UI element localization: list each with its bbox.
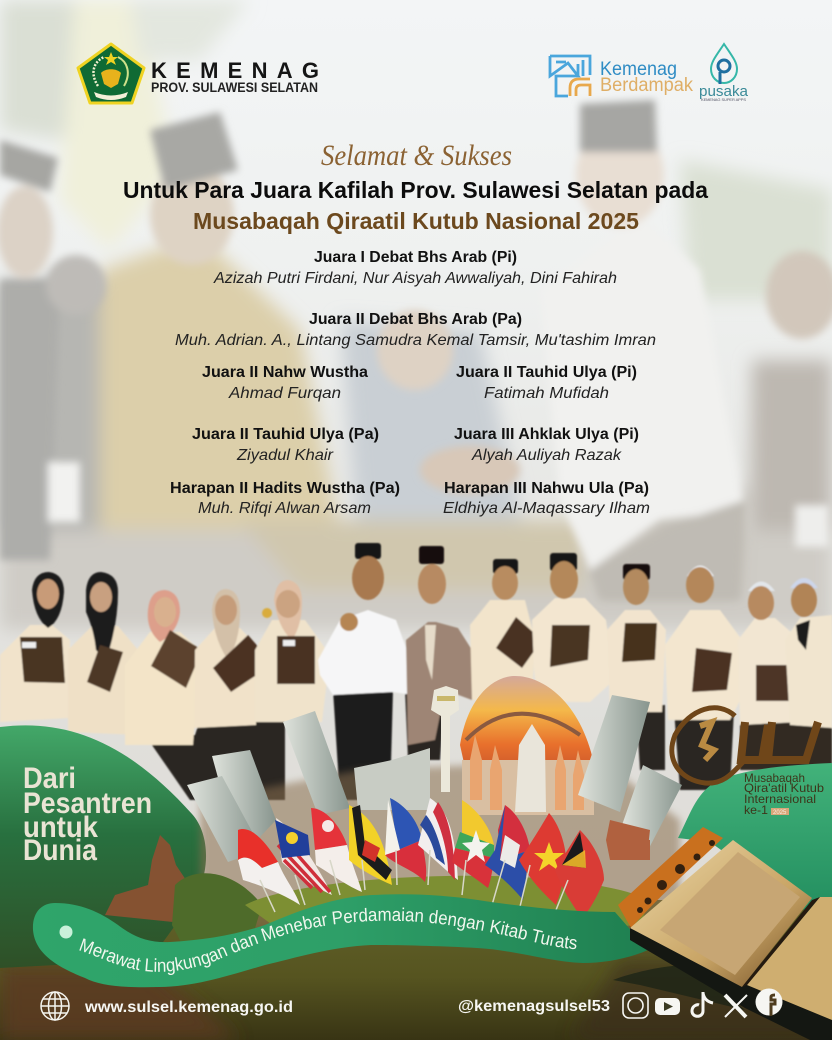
ASEAN flags — [238, 798, 604, 920]
ribbon dot — [60, 926, 72, 938]
footer: website — [41, 992, 293, 1020]
winner: Hadits Wustha — [170, 480, 400, 517]
winner: Tauhid Ulya Pi: Fatimah Mufidah — [484, 385, 609, 402]
icon: youtube — [655, 998, 680, 1015]
winner: Debat Bhs Arab Pa — [175, 311, 656, 349]
winner: Ahklak Ulya: Alyah Auliyah Razak — [471, 447, 622, 464]
flag: Philippines — [385, 798, 426, 882]
building: low centre block — [354, 748, 430, 810]
winner: Nahwu Ula: Eldhiya Al-Maqassary Ilham — [443, 500, 650, 517]
text: handle: @kemenagsulsel53 — [458, 998, 610, 1015]
flag: Brunei — [349, 805, 392, 885]
flag: Singapore — [311, 808, 362, 892]
icon: instagram — [623, 993, 648, 1018]
right brown haze — [570, 960, 832, 1040]
right green wave panel — [678, 763, 832, 930]
winner: Ahklak Ulya: Juara III Ahklak Ulya (Pi) — [454, 426, 639, 443]
slogan ribbon: Merawat Lingkungan dan Menebar Perdamaian dengan Kitab Turats — [79, 908, 577, 975]
flag poles — [260, 850, 568, 920]
ribbon text — [78, 921, 592, 972]
winner: Nahw Wustha: Juara II Nahw Wustha — [202, 364, 368, 381]
winner: Ahklak Ulya — [454, 426, 639, 464]
MQK logo — [672, 708, 824, 817]
icon: Berdampak mark — [550, 56, 590, 96]
winner: Tauhid Ulya Pi: Juara II Tauhid Ulya (Pi) — [456, 364, 637, 381]
left green wave panel — [0, 725, 206, 968]
person: student 7 — [532, 553, 614, 702]
greeting script: Selamat & Sukses — [321, 139, 512, 172]
winner: Hadits Wustha: Harapan II Hadits Wustha (Pa) — [170, 480, 400, 497]
person: student 8 — [607, 564, 666, 712]
text: pusaka tagline: KEMENAG SUPER APPS — [701, 97, 746, 102]
open holy book — [613, 827, 832, 1040]
trousers — [145, 720, 285, 800]
winner: Tauhid Ulya Pa: Juara II Tauhid Ulya (Pa) — [192, 426, 379, 443]
wooden spine — [618, 827, 723, 928]
title line 2: Musabaqah Qiraatil Kutub Nasional 2025 — [193, 208, 639, 234]
flag: Timor-Leste — [555, 830, 604, 918]
slogan: Dari Pesantren untuk Dunia: Dunia — [23, 834, 97, 867]
flag: Thailand — [418, 798, 458, 880]
icon: X — [725, 995, 747, 1017]
flag: Malaysia — [275, 818, 332, 895]
building: left cluster — [187, 750, 276, 862]
winner: Nahwu Ula: Harapan III Nahwu Ula (Pa) — [444, 480, 649, 497]
winner: Debat Bhs Arab Pi — [213, 249, 617, 287]
slogan: Dari Pesantren untuk Dunia: Dari — [23, 762, 76, 795]
slogan: Dari Pesantren untuk Dunia — [23, 762, 152, 867]
building: tall left tower — [283, 711, 350, 815]
text: pusaka: pusaka — [699, 83, 749, 100]
flag: Vietnam — [519, 813, 566, 905]
winner: Tauhid Ulya Pi — [456, 364, 637, 402]
flag: Cambodia — [485, 805, 530, 900]
person: student 10 — [738, 582, 800, 725]
winner: Debat Bhs Arab Pi: Juara I Debat Bhs Arab (Pi) — [314, 249, 517, 266]
winner: Debat Bhs Arab Pi: Azizah Putri Firdani, Nur Aisyah Awwaliyah, Dini Fahirah — [213, 270, 617, 287]
person: student 5 — [255, 580, 330, 722]
building: right block — [622, 765, 682, 850]
city illustration — [105, 676, 682, 960]
lawn — [245, 876, 650, 945]
person: official in brown blazer — [406, 546, 472, 745]
mid tone behind city — [200, 760, 680, 930]
ribbon shape — [33, 894, 648, 987]
title line 1: Untuk Para Juara Kafilah Prov. Sulawesi Selatan pada — [123, 177, 708, 203]
header logo: Pusaka — [699, 44, 749, 102]
right page — [742, 897, 832, 1020]
header logo: Kemenag Berdampak — [550, 56, 693, 96]
group photo of winners and officials — [0, 543, 832, 800]
footer: social media — [458, 988, 782, 1018]
person: student 4 — [194, 589, 273, 728]
slogan: Dari Pesantren untuk Dunia: Pesantren — [23, 787, 152, 820]
caption: event name: ke-1 — [744, 803, 768, 817]
wordmark: province: PROV. SULAWESI SELATAN — [151, 80, 318, 95]
person: student 2 — [68, 572, 138, 735]
book shadow — [613, 965, 745, 1010]
text: website url: www.sulsel.kemenag.go.id — [84, 999, 293, 1016]
icon: ring emblem — [672, 708, 818, 783]
wordmark: KEMENAG: KEMENAG — [151, 58, 319, 83]
flag: Indonesia — [238, 829, 300, 905]
building: tall right tower — [578, 695, 650, 812]
header logo: Kemenag emblem and wordmark — [78, 44, 319, 103]
text: Kemenag: Kemenag — [600, 59, 677, 80]
caption: event name: Internasional — [744, 792, 816, 806]
winner: Hadits Wustha: Muh. Rifqi Alwan Arsam — [198, 500, 371, 517]
building: right traditional hall — [606, 820, 650, 860]
book cover edge — [630, 926, 832, 1040]
icon: globe — [41, 992, 69, 1020]
winner: Tauhid Ulya Pa: Ziyadul Khair — [236, 447, 334, 464]
winner: Nahwu Ula — [443, 480, 650, 517]
building: traditional pagoda — [105, 835, 202, 925]
slogan ribbon — [32, 894, 648, 988]
left page — [630, 840, 812, 987]
building: Monas tower — [431, 686, 459, 792]
text: Berdampak: Berdampak — [600, 75, 693, 96]
caption: event name — [744, 771, 824, 817]
person: student 3 — [125, 590, 202, 745]
caption: event name: Qira'atil Kutub — [744, 781, 824, 795]
slogan: Dari Pesantren untuk Dunia: untuk — [23, 811, 98, 844]
winner: Tauhid Ulya Pa — [192, 426, 379, 464]
winner: Debat Bhs Arab Pa: Juara II Debat Bhs Arab (Pa) — [309, 311, 522, 328]
caption: event name: Musabaqah — [744, 771, 805, 785]
caption: event name: 2025 — [773, 810, 787, 816]
person: official in white shirt — [318, 543, 414, 695]
winner: Nahw Wustha — [202, 364, 368, 402]
person: student 6 — [470, 559, 542, 700]
person: student 1 — [0, 572, 70, 722]
icon: pusaka water drop — [711, 44, 737, 84]
icon: tiktok — [692, 992, 713, 1016]
winner: Nahw Wustha: Ahmad Furqan — [228, 385, 341, 402]
person: student 11 — [785, 578, 832, 728]
winner: Debat Bhs Arab Pa: Muh. Adrian. A., Lintang Samudra Kemal Tamsir, Mu'tashim Imran — [175, 332, 656, 349]
icon: facebook — [756, 988, 782, 1016]
trees — [172, 873, 262, 960]
left brown haze — [0, 965, 240, 1040]
person: student 9 — [665, 566, 748, 720]
icon: Kemenag pentagon emblem — [78, 44, 144, 103]
flag: Myanmar — [452, 800, 494, 888]
building: colourful dome — [460, 676, 596, 815]
bottom ground colour band — [0, 900, 832, 1040]
